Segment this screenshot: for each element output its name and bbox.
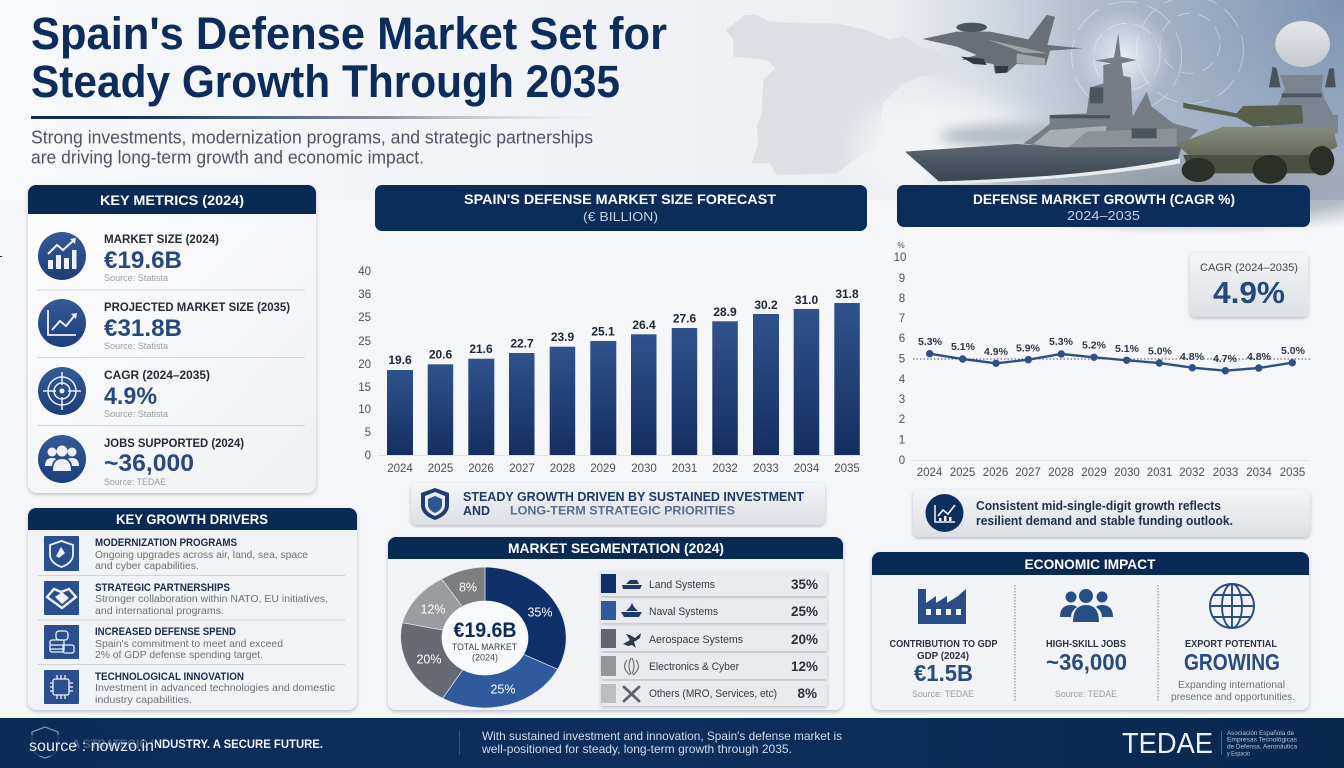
icon: people <box>1060 589 1113 622</box>
y axis labels: 9 <box>899 273 905 285</box>
y axis labels: 10 <box>894 252 906 264</box>
bar values: 28.9 <box>713 305 737 319</box>
bar values: 25.1 <box>591 324 615 338</box>
metric: projected market size: PROJECTED MARKET SIZE (2035) <box>104 302 290 314</box>
donut chart: 20% <box>416 652 442 666</box>
metric: contribution to GDP: CONTRIBUTION TO GDP <box>890 639 998 650</box>
title: Spain's Defense Market Set for <box>31 8 667 59</box>
data labels <box>918 336 1306 365</box>
donut chart <box>401 567 566 708</box>
legend labels: Naval Systems <box>649 606 718 618</box>
panel heading: key growth drivers <box>28 508 357 530</box>
y axis labels: 6 <box>899 333 905 345</box>
donut chart: (2024) <box>472 652 498 662</box>
icon: shield <box>44 536 79 571</box>
legend icon: land <box>622 580 642 589</box>
x axis years: 2033 <box>1213 467 1238 479</box>
y axis labels: % <box>897 241 905 250</box>
x axis years: 2034 <box>1246 467 1272 479</box>
driver: increased defense spend: INCREASED DEFENSE SPEND <box>95 626 236 638</box>
x axis years: 2029 <box>1081 467 1107 479</box>
hero image: radar rings <box>1072 0 1243 112</box>
metric: export potential: EXPORT POTENTIAL <box>1185 639 1277 650</box>
x axis years: 2026 <box>983 467 1008 479</box>
legend <box>601 571 827 706</box>
metric: market size: MARKET SIZE (2024) <box>104 234 219 246</box>
metric: high-skill jobs: Source: TEDAE <box>1055 689 1117 700</box>
data labels: 5.2% <box>1082 340 1107 352</box>
legend labels <box>649 577 818 701</box>
x axis years: 2030 <box>631 463 657 475</box>
bar values: 31.0 <box>795 293 819 307</box>
y axis labels: 25 <box>358 312 371 324</box>
metric: high-skill jobs: HIGH-SKILL JOBS <box>1046 639 1126 650</box>
hero image: fighter jet <box>922 15 1083 73</box>
callout: steady growth <box>411 483 825 525</box>
driver: increased defense spend <box>95 626 283 661</box>
x axis years: 2035 <box>834 463 860 475</box>
metric: projected market size <box>104 302 290 351</box>
x axis years: 2025 <box>428 463 453 475</box>
icon: globe <box>1210 584 1254 628</box>
driver: technological innovation: Investment in advanced technologies and domestic <box>95 682 335 694</box>
metric: jobs supported <box>104 438 244 487</box>
data labels: 5.3% <box>1049 336 1074 348</box>
x axis years: 2032 <box>1179 467 1205 479</box>
panel heading: key growth drivers: KEY GROWTH DRIVERS <box>116 511 268 527</box>
y axis labels: 8 <box>899 293 905 305</box>
driver: modernization programs <box>95 537 308 572</box>
y axis labels: 15 <box>358 382 371 394</box>
heading: market size forecast: SPAIN'S DEFENSE MARKET SIZE FORECAST <box>464 191 776 207</box>
callout: CAGR value: 4.9% <box>1213 275 1285 310</box>
driver: strategic partnerships: STRATEGIC PARTNERSHIPS <box>95 582 230 594</box>
hero image: tank <box>1177 103 1337 184</box>
metric: projected market size: €31.8B <box>104 315 182 342</box>
footer band <box>0 718 1344 768</box>
map of Spain <box>726 15 953 175</box>
metric: jobs supported: Source: TEDAE <box>104 477 166 487</box>
donut chart: 12% <box>420 602 446 616</box>
bar chart: market size forecast <box>358 266 864 475</box>
x axis years: 2027 <box>509 463 535 475</box>
subtitle <box>31 128 593 168</box>
bar values: 26.4 <box>632 318 656 332</box>
metric: market size <box>104 234 219 283</box>
metric: export potential: GROWING <box>1184 649 1280 675</box>
bar values: 27.6 <box>673 312 697 326</box>
y axis labels: 5 <box>899 354 905 366</box>
y axis labels: 2 <box>899 414 905 426</box>
logo: TEDAE: y Espacio <box>1227 752 1251 758</box>
line chart: CAGR <box>894 241 1310 479</box>
legend labels: 20% <box>791 632 818 647</box>
x axis years: 2024 <box>387 463 413 475</box>
legend labels: 8% <box>797 686 817 701</box>
footer message <box>481 729 842 756</box>
callout: consistent growth: Consistent mid-single-digit growth reflects <box>976 499 1221 513</box>
metric: projected market size: Source: Statista <box>104 341 168 351</box>
y axis labels: 36 <box>358 289 371 301</box>
heading: defense market growth: 2024–2035 <box>1067 208 1140 223</box>
y axis labels: 5 <box>365 427 371 439</box>
logo: TEDAE: TEDAE <box>1122 728 1213 760</box>
donut chart: 25% <box>490 682 516 696</box>
heading: market size forecast: (€ BILLION) <box>583 209 658 224</box>
y axis labels: 3 <box>899 394 905 406</box>
y axis labels: 0 <box>365 450 371 462</box>
icon: handshake <box>44 581 79 615</box>
data labels: 5.1% <box>1115 343 1140 355</box>
driver: strategic partnerships: and international programs. <box>95 605 224 617</box>
footer tagline: A STRATEGIC INDUSTRY. A SECURE FUTURE. <box>72 737 323 751</box>
icon: line chart <box>38 299 86 347</box>
driver: technological innovation: industry capabilities. <box>95 694 192 706</box>
heading: market size forecast <box>375 185 867 231</box>
driver: strategic partnerships: Stronger collaboration within NATO, EU initiatives, <box>95 593 328 605</box>
y axis labels: 10 <box>358 404 371 416</box>
callout: steady growth: STEADY GROWTH DRIVEN BY SUSTAINED INVESTMENT <box>463 490 804 504</box>
legend labels: 12% <box>791 659 818 674</box>
metric: jobs supported: ~36,000 <box>104 450 194 477</box>
metric: contribution to GDP: €1.5B <box>914 660 973 686</box>
x axis years <box>387 463 860 475</box>
metric: market size: €19.6B <box>104 247 182 274</box>
data labels: 5.1% <box>951 341 976 353</box>
driver: modernization programs: Ongoing upgrades across air, land, sea, space <box>95 549 308 561</box>
data labels: 4.8% <box>1247 351 1272 363</box>
metric: CAGR <box>104 370 210 419</box>
donut chart: €19.6B <box>454 619 516 642</box>
x axis years: 2031 <box>1147 467 1172 479</box>
metric: CAGR: CAGR (2024–2035) <box>104 370 210 382</box>
driver: increased defense spend: Spain's commitment to meet and exceed <box>95 638 283 650</box>
subtitle: Strong investments, modernization programs, and strategic partnerships <box>31 128 593 148</box>
y axis labels: 4 <box>899 374 906 386</box>
icon: rising bar chart <box>38 232 86 280</box>
y axis labels <box>894 241 906 467</box>
legend icon: aircraft <box>623 633 641 648</box>
icon: target <box>38 367 86 415</box>
legend labels: 35% <box>791 577 818 592</box>
footer message: well-positioned for steady, long-term growth through 2035. <box>481 742 792 756</box>
driver: modernization programs: and cyber capabilities. <box>95 560 199 572</box>
data points <box>926 350 1296 374</box>
data labels: 4.8% <box>1180 351 1205 363</box>
legend labels: Electronics & Cyber <box>649 661 739 673</box>
panel heading: key metrics: KEY METRICS (2024) <box>100 192 244 208</box>
driver: strategic partnerships <box>95 582 328 617</box>
bar values: 30.2 <box>754 298 778 312</box>
metric: contribution to GDP: Source: TEDAE <box>912 689 974 700</box>
driver: technological innovation: TECHNOLOGICAL INNOVATION <box>95 671 244 683</box>
x axis years: 2027 <box>1015 467 1041 479</box>
donut chart: 8% <box>459 580 477 594</box>
legend labels: 25% <box>791 604 818 619</box>
icon: shield badge <box>421 488 449 520</box>
title: Steady Growth Through 2035 <box>31 56 620 107</box>
logo: TEDAE: de Defensa, Aeronáutica <box>1227 744 1298 750</box>
trend line <box>930 354 1292 371</box>
metric: export potential: Expanding international <box>1178 679 1285 691</box>
bar values: 21.6 <box>469 342 493 356</box>
panel: key growth drivers <box>28 508 357 710</box>
x axis years: 2029 <box>590 463 616 475</box>
data labels: 4.7% <box>1213 353 1238 365</box>
icon: footer shield <box>32 727 58 758</box>
heading: defense market growth: DEFENSE MARKET GROWTH (CAGR %) <box>973 191 1235 207</box>
title <box>31 8 667 107</box>
x axis years: 2024 <box>917 467 943 479</box>
panel heading: market segmentation <box>388 537 843 559</box>
callout: consistent growth: resilient demand and stable funding outlook. <box>976 514 1233 528</box>
bar values <box>388 287 859 367</box>
panel: key metrics <box>28 185 316 493</box>
icon: people <box>38 435 86 483</box>
bar values: 19.6 <box>388 353 412 367</box>
x axis years: 2028 <box>1048 467 1074 479</box>
metric: market size: Source: Statista <box>104 273 168 283</box>
panel heading: economic impact <box>872 552 1309 575</box>
driver: increased defense spend: 2% of GDP defense spending target. <box>95 649 263 661</box>
data labels: 5.9% <box>1016 342 1041 354</box>
y axis labels: 1 <box>899 434 905 446</box>
donut chart: TOTAL MARKET <box>452 642 517 652</box>
x axis years: 2025 <box>950 467 975 479</box>
icon: factory <box>918 589 966 624</box>
logo: TEDAE <box>1122 728 1298 760</box>
logo: TEDAE: Empresas Tecnológicas <box>1227 738 1297 744</box>
metric: high-skill jobs: ~36,000 <box>1046 649 1127 675</box>
legend labels: Land Systems <box>649 579 715 591</box>
y axis labels: 0 <box>899 455 905 467</box>
y axis labels: 40 <box>358 266 371 278</box>
heading: defense market growth <box>897 185 1310 227</box>
metric: contribution to GDP: GDP (2024) <box>917 651 969 662</box>
x axis years: 2030 <box>1114 467 1140 479</box>
y axis labels: 20 <box>358 359 371 371</box>
data labels: 5.0% <box>1148 346 1173 358</box>
metric: high-skill jobs <box>1046 639 1127 700</box>
panel heading: market segmentation: MARKET SEGMENTATION (2024) <box>508 540 724 556</box>
icon: coins <box>44 625 79 659</box>
legend labels: Others (MRO, Services, etc) <box>649 688 777 700</box>
legend icon: electronics <box>625 658 638 675</box>
logo: TEDAE: Asociación Española de <box>1227 731 1295 737</box>
hero background <box>0 0 1344 235</box>
metric: export potential <box>1171 639 1295 703</box>
callout: steady growth: LONG-TERM STRATEGIC PRIORITIES <box>510 504 735 518</box>
y axis labels: 25 <box>358 336 371 348</box>
x axis years: 2033 <box>753 463 779 475</box>
bar values: 23.9 <box>551 330 575 344</box>
y axis labels <box>358 266 371 462</box>
x axis years: 2032 <box>712 463 738 475</box>
callout: CAGR value: CAGR (2024–2035) <box>1200 262 1298 274</box>
data labels: 5.0% <box>1281 345 1306 357</box>
bar values: 20.6 <box>429 348 453 362</box>
donut chart: 35% <box>527 606 553 620</box>
legend icon: tools <box>624 687 639 701</box>
x axis years: 2028 <box>550 463 575 475</box>
data labels: 5.3% <box>918 336 943 348</box>
metric: export potential: presence and opportunities. <box>1171 691 1295 703</box>
callout: CAGR value <box>1190 253 1308 317</box>
icon: growth circle <box>926 494 964 532</box>
legend labels: Aerospace Systems <box>649 634 743 646</box>
hero image: radar tower <box>1267 21 1338 133</box>
callout: consistent growth <box>913 490 1310 537</box>
x axis years <box>917 467 1305 479</box>
bars <box>387 303 860 455</box>
metric: jobs supported: JOBS SUPPORTED (2024) <box>104 438 244 450</box>
data labels: 4.9% <box>984 346 1009 358</box>
bar values: 31.8 <box>835 287 859 301</box>
metric: CAGR: 4.9% <box>104 383 157 410</box>
driver: technological innovation <box>95 671 335 706</box>
legend icon: naval <box>621 603 642 617</box>
footer message: With sustained investment and innovation, Spain's defense market is <box>482 729 842 743</box>
panel: economic impact <box>872 552 1309 710</box>
metric: CAGR: Source: Statista <box>104 409 168 419</box>
y axis labels: 7 <box>899 313 905 325</box>
panel heading: key metrics <box>28 185 316 214</box>
panel: market segmentation <box>388 537 843 710</box>
x axis years: 2034 <box>794 463 820 475</box>
bar values: 22.7 <box>510 336 534 350</box>
source watermark: source : nowzo.in <box>29 738 154 755</box>
x axis years: 2035 <box>1280 467 1305 479</box>
callout: steady growth: AND <box>463 504 490 518</box>
panel heading: economic impact: ECONOMIC IMPACT <box>1024 556 1156 572</box>
icon: microchip <box>44 670 79 704</box>
hero image: warship <box>905 33 1198 184</box>
subtitle: are driving long-term growth and economic impact. <box>31 148 424 168</box>
driver: modernization programs: MODERNIZATION PROGRAMS <box>95 537 237 549</box>
metric: contribution to GDP <box>890 639 998 700</box>
x axis years: 2031 <box>672 463 697 475</box>
x axis years: 2026 <box>468 463 494 475</box>
